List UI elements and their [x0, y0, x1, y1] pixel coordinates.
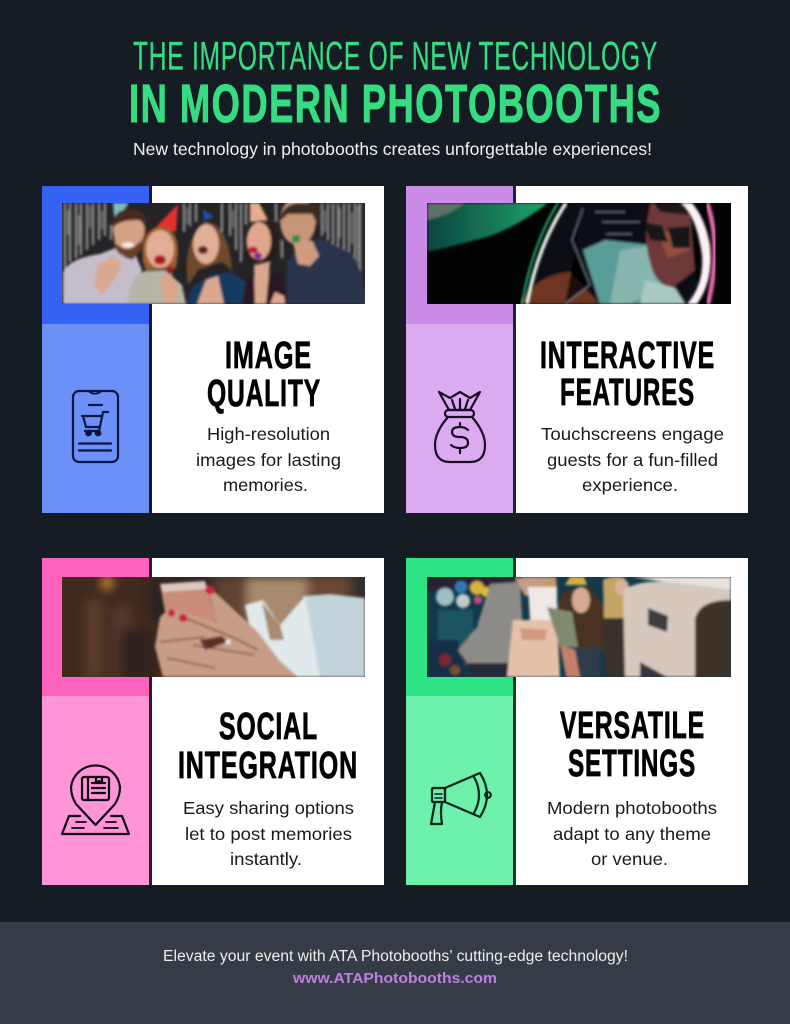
body text: social integration — [183, 798, 354, 869]
body text: social integration: Easy sharing options — [183, 798, 354, 818]
body text: social integration: instantly. — [230, 849, 302, 869]
blonde woman — [603, 577, 625, 620]
heading: image quality: IMAGE — [225, 335, 312, 377]
man 5 — [287, 238, 366, 304]
heading: interactive features: FEATURES — [560, 372, 695, 414]
heading: interactive features — [540, 335, 715, 414]
panel: versatile settings — [406, 558, 748, 885]
woman 2 — [128, 270, 186, 304]
heading: social integration — [178, 706, 358, 787]
body text: interactive features: experience. — [582, 475, 678, 495]
photo: hands holding phone — [62, 577, 370, 677]
body text: versatile settings: Modern photobooths — [547, 798, 717, 818]
heading: versatile settings — [560, 705, 705, 785]
icon: megaphone — [431, 773, 491, 824]
icon: map location pin with book — [62, 765, 129, 834]
body text: social integration: let to post memories — [185, 824, 352, 844]
subtitle: New technology in photobooths creates unforgettable experiences! — [133, 139, 652, 159]
icon: money bag — [435, 392, 485, 462]
body text: image quality: images for lasting — [196, 450, 341, 470]
body text: image quality — [196, 424, 341, 495]
body text: versatile settings: adapt to any theme — [553, 824, 711, 844]
woman 4 — [250, 203, 268, 222]
panel: social integration — [42, 558, 384, 885]
body text: interactive features: Touchscreens engage — [541, 424, 724, 444]
heading: social integration: INTEGRATION — [178, 745, 358, 787]
panel: image quality — [42, 186, 384, 513]
photo: party guests — [62, 197, 366, 304]
body text: versatile settings: or venue. — [591, 849, 668, 869]
footer message: Elevate your event with ATA Photobooths’ cutting-edge technology! — [163, 948, 628, 965]
icon: phone with shopping cart — [73, 391, 118, 462]
footer website link: www.ATAPhotobooths.com — [292, 970, 497, 987]
man 1 — [63, 247, 142, 304]
body text: interactive features — [541, 424, 724, 495]
body text: interactive features: guests for a fun-filled — [547, 450, 718, 470]
woman 3 — [203, 209, 214, 221]
photobooth — [623, 582, 731, 677]
heading: social integration: SOCIAL — [219, 706, 318, 748]
man and bride — [467, 663, 513, 677]
heading: versatile settings: VERSATILE — [560, 705, 705, 747]
heading: image quality: QUALITY — [207, 373, 321, 415]
footer banner — [0, 922, 790, 1024]
body text: image quality: memories. — [223, 475, 308, 495]
panel: interactive features — [406, 186, 748, 513]
body text: versatile settings — [547, 798, 717, 869]
body text: image quality: High-resolution — [207, 424, 330, 444]
woman in floral blouse — [555, 587, 607, 655]
photo: guests at photobooth — [427, 577, 731, 677]
heading: image quality — [207, 335, 321, 415]
heading: versatile settings: SETTINGS — [568, 743, 696, 785]
photo: ring light touchscreen — [427, 203, 731, 304]
title — [129, 34, 662, 134]
